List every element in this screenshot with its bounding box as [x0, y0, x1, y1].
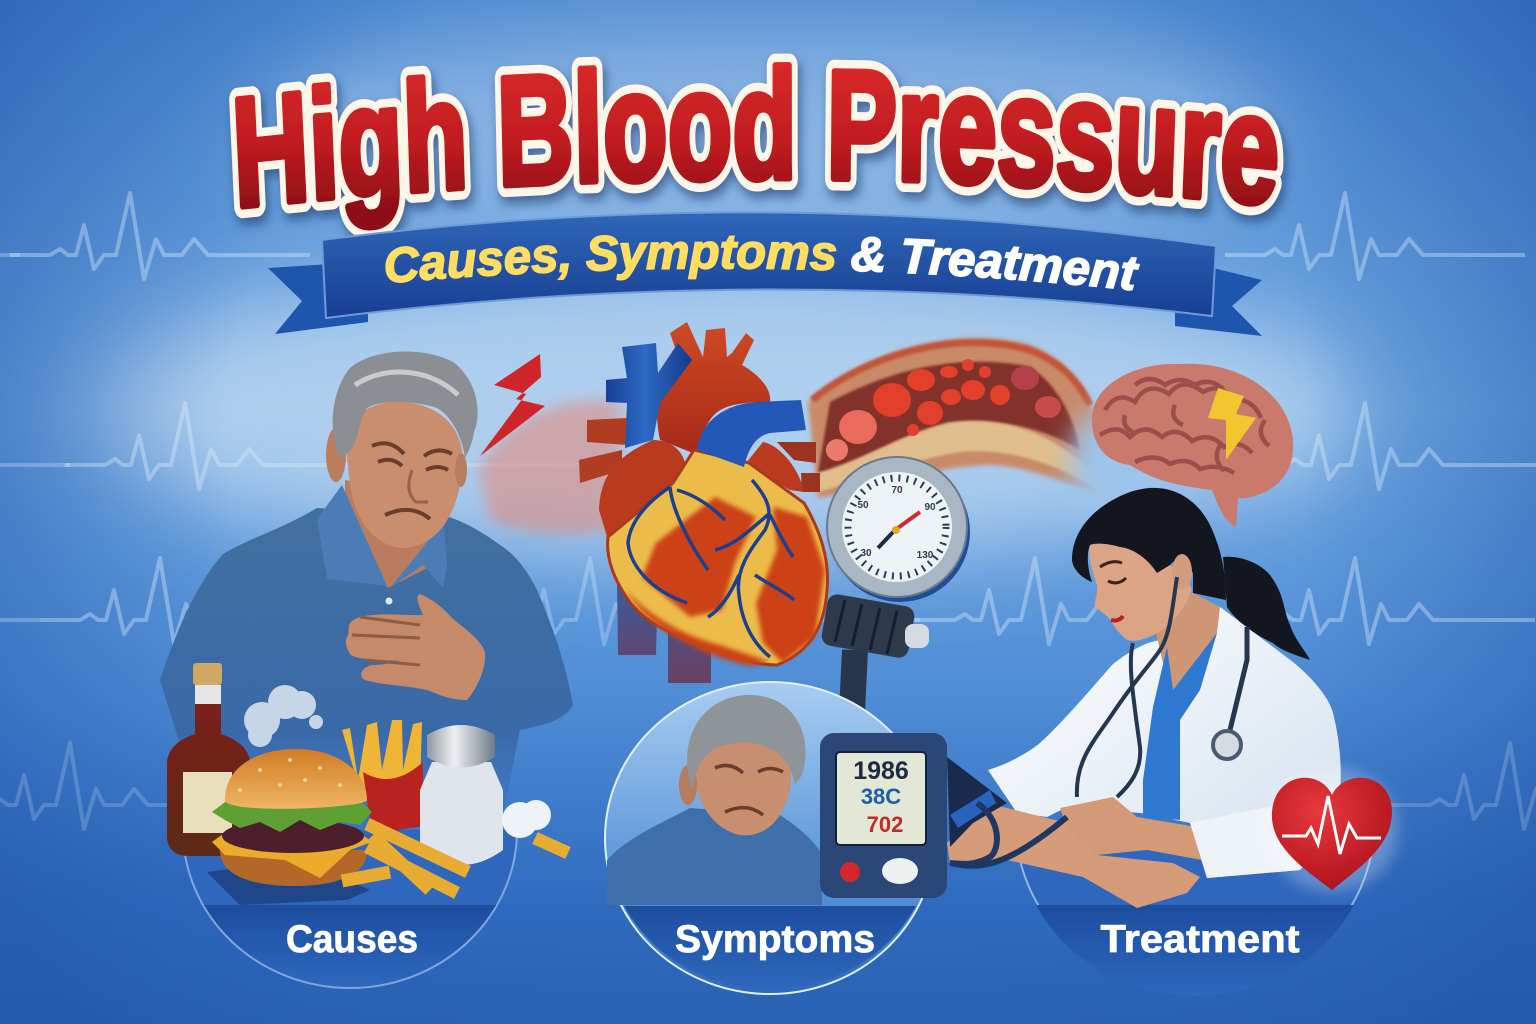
panel: symptoms — [605, 682, 947, 994]
hair — [1072, 488, 1226, 600]
digital blood pressure monitor: 1986 — [853, 757, 909, 785]
blood pressure gauge: 130 — [917, 550, 934, 561]
man with chest pain — [160, 352, 573, 830]
aorta branches and arch — [657, 322, 770, 455]
symptoms label: Symptoms — [675, 918, 875, 961]
shirt collar — [317, 485, 447, 588]
digital blood pressure monitor — [820, 733, 947, 898]
lower coat sleeve — [1190, 800, 1300, 878]
face — [1089, 543, 1192, 641]
digital blood pressure monitor: 702 — [867, 812, 903, 837]
face features — [372, 443, 452, 519]
patty — [222, 819, 364, 853]
smoke cloud — [244, 685, 323, 747]
right red stubs — [777, 442, 820, 492]
symptoms label band — [624, 906, 916, 989]
hand on chest — [346, 594, 485, 700]
eye and lips — [1100, 562, 1126, 583]
panel: causes — [167, 663, 568, 988]
blood pressure cuff — [947, 757, 1067, 866]
doctor forearm and hand — [1060, 797, 1202, 860]
ribbon band — [322, 212, 1216, 318]
head — [345, 401, 463, 548]
left atrium — [599, 440, 685, 540]
lettuce — [212, 802, 372, 832]
gauge dial — [830, 462, 970, 602]
ribbon left tail — [268, 264, 368, 334]
bottom bun — [220, 850, 367, 886]
burger — [207, 749, 372, 905]
left red stubs — [579, 418, 627, 483]
title: High Blood Pressure — [228, 54, 1292, 236]
brain — [1092, 364, 1293, 527]
blood pressure gauge: 70 — [891, 485, 903, 496]
ear — [1172, 554, 1192, 590]
fries box — [342, 720, 423, 834]
pink tissue glow — [478, 400, 620, 533]
digital blood pressure monitor: 38C — [861, 784, 901, 809]
treatment label: Treatment — [1100, 918, 1300, 961]
lab coat — [988, 607, 1341, 878]
artery cross-section — [808, 338, 1160, 525]
ribbon right tail — [1175, 266, 1262, 336]
blood pressure gauge: 30 — [860, 548, 872, 559]
right atrium — [746, 442, 804, 492]
artery fade — [1070, 405, 1160, 525]
gauge stalk — [852, 650, 855, 712]
stethoscope — [1077, 577, 1247, 797]
blood pressure gauge: 50 — [857, 500, 869, 511]
subtitle text: Causes, Symptoms & Treatment — [385, 235, 1140, 291]
heart ventricle body — [608, 450, 828, 665]
subtitle ribbon — [268, 212, 1262, 336]
heart anatomy — [579, 322, 828, 683]
top bun — [225, 749, 367, 809]
coronary vessels — [628, 480, 794, 657]
liquor bottle — [167, 663, 250, 856]
neck — [345, 480, 445, 588]
burger tray — [207, 860, 370, 905]
pulmonary blue arch — [697, 400, 806, 467]
ears — [326, 428, 346, 482]
blood pressure gauge: 90 — [924, 502, 936, 513]
vessels behind heart — [617, 583, 711, 683]
icon: heart with pulse — [1266, 768, 1398, 892]
artery lumen — [818, 362, 1080, 473]
blood pressure gauge — [820, 457, 970, 712]
gauge clamp — [820, 593, 916, 659]
artery outer wall — [808, 338, 1110, 500]
ventricle muscle patches — [625, 497, 825, 666]
treatment circle — [1016, 825, 1374, 991]
small man — [607, 695, 822, 905]
title: High Blood Pressure — [235, 62, 1278, 230]
causes circle — [183, 830, 517, 988]
neck and chest — [1150, 593, 1220, 707]
causes label band — [204, 905, 496, 986]
doctor — [947, 488, 1341, 908]
patient arm — [947, 803, 1200, 908]
blue scrubs — [1143, 633, 1217, 820]
shirt — [160, 508, 573, 830]
salt shaker — [420, 725, 551, 865]
red blood cells — [826, 359, 1061, 461]
symptoms circle — [605, 682, 935, 994]
causes label: Causes — [286, 918, 418, 961]
ponytail — [1223, 557, 1310, 660]
scattered fries — [342, 824, 568, 893]
panel: treatment — [947, 488, 1398, 996]
cheese — [212, 829, 372, 878]
hair — [333, 352, 478, 458]
shirt button — [386, 598, 392, 604]
superior vena cava — [606, 343, 692, 448]
icon: red lightning bolt — [480, 354, 545, 456]
ECG background lines — [0, 193, 1536, 829]
treatment label band — [1036, 905, 1354, 996]
right ear — [455, 453, 467, 487]
icon: brain lightning — [1208, 388, 1256, 460]
artery plaque layer — [818, 421, 1108, 495]
